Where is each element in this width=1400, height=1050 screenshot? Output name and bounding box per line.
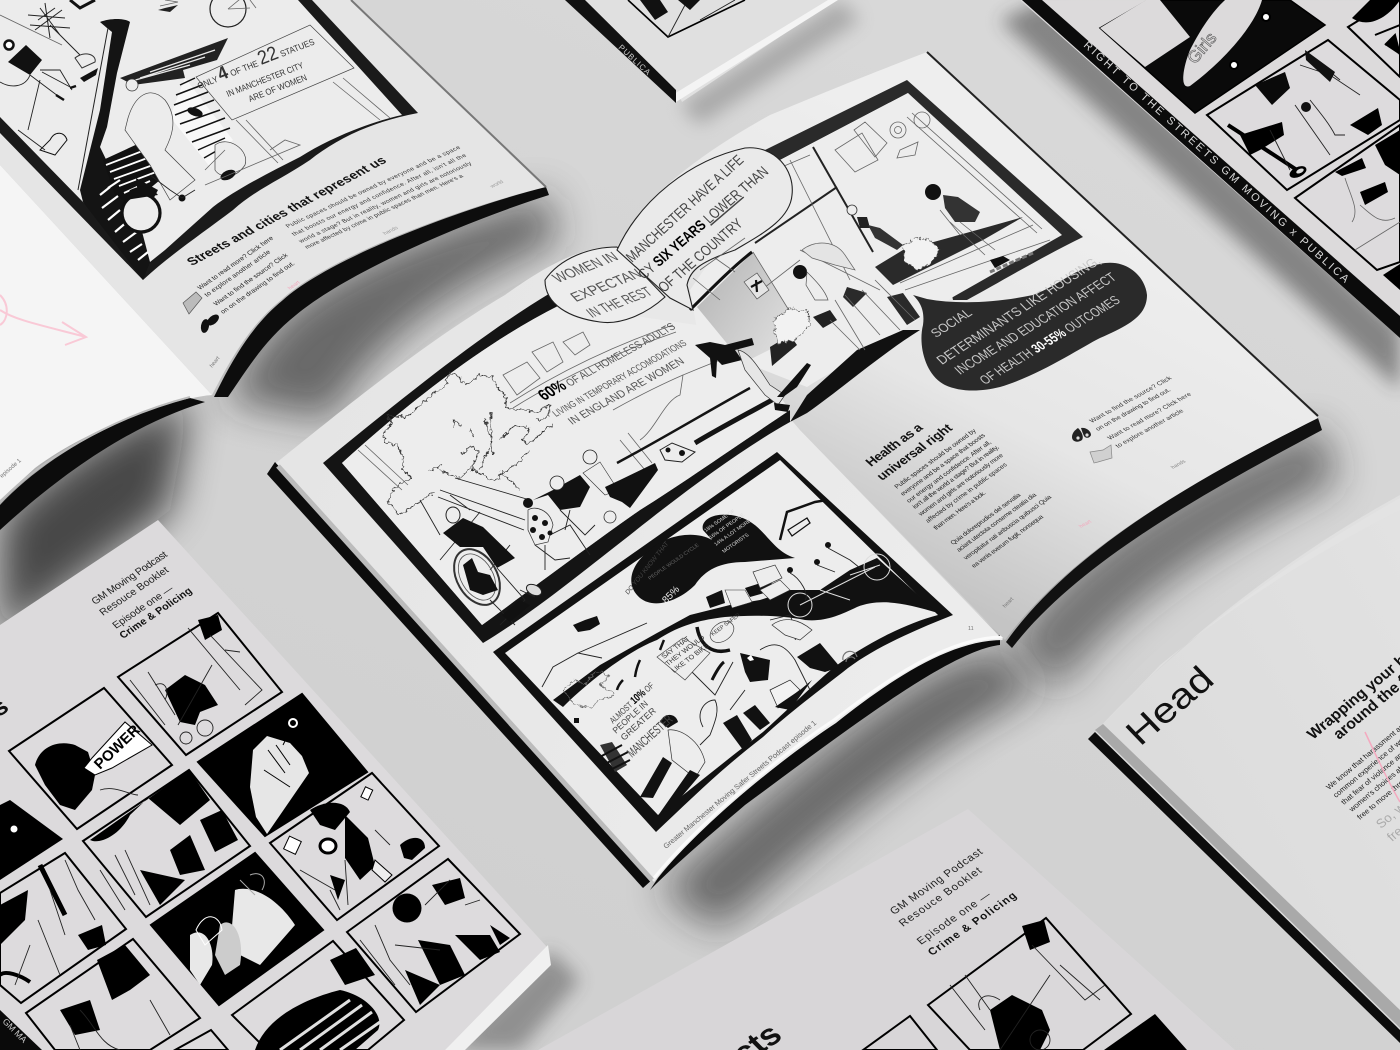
tree scribble bbox=[563, 672, 615, 708]
protesters bbox=[617, 615, 857, 778]
body text: health: veropitatur rati aribuscia quibusci Quia bbox=[962, 494, 1054, 561]
footers and page number: heart bbox=[1078, 519, 1094, 529]
panel: pole and walkers bbox=[0, 853, 126, 1003]
panel: figure with hat bbox=[26, 939, 200, 1050]
statistic text: IN ENGLAND ARE WOMEN bbox=[566, 356, 687, 427]
panel: sun and figures bbox=[347, 859, 520, 1012]
booklet: bottom-centre cover bbox=[538, 809, 1235, 1050]
call to action notes: Want to read more? Click here bbox=[196, 235, 276, 291]
billboard with statues statistic: IN MANCHESTER CITY bbox=[225, 60, 305, 99]
bicycle bbox=[160, 0, 256, 27]
cover titles: Crime & Policing bbox=[118, 586, 195, 641]
comic panel one: homeless statistic bbox=[323, 292, 790, 643]
cover panel: figure bbox=[1295, 125, 1400, 270]
heading: health: universal right bbox=[873, 421, 956, 483]
black speech bubble: 18% SOME OF bbox=[703, 509, 737, 533]
black road stripes bbox=[640, 757, 700, 817]
billboard with statues statistic: ARE OF WOMEN bbox=[247, 72, 308, 104]
body text: health: than men. Here's a look. bbox=[932, 490, 988, 531]
body text: health: aciant utectota conseme cteatia dia bbox=[955, 492, 1039, 553]
road stripes bbox=[617, 388, 772, 463]
protest sign bbox=[657, 635, 711, 680]
protest sign: LIKE TO BIKE bbox=[670, 643, 711, 674]
spine text: PUBLICA bbox=[617, 43, 653, 77]
call to action notes: Want to find the source? Click bbox=[1088, 375, 1174, 424]
skateboarder across the gutter bbox=[695, 338, 811, 412]
footer line: Greater Manchester Moving Safer Streets Podcast episode 1 bbox=[661, 718, 818, 850]
cover titles: Resouce Booklet bbox=[897, 865, 985, 929]
black speech bubble: PEOPLE WOULD CYCLE bbox=[647, 543, 701, 581]
body text: health: Quia doloreprudios del servatia bbox=[949, 492, 1023, 546]
cover titles: GM Moving Podcast bbox=[90, 550, 170, 607]
statistic text: ten percent bbox=[607, 680, 675, 760]
frame bbox=[765, 80, 1083, 300]
badge: KEEP SAFER bbox=[710, 612, 742, 637]
call to action notes: on on the drawing to find out. bbox=[219, 260, 297, 315]
cover panel bbox=[628, 0, 745, 37]
black speech bubble: 85% bbox=[660, 584, 682, 606]
billboard with statues statistic bbox=[192, 25, 390, 163]
speech bubble: social determinants: OF HEALTH 30-55% OUTCOMES bbox=[976, 293, 1123, 387]
page shadow band bbox=[214, 187, 549, 397]
house line drawing bbox=[542, 500, 827, 687]
panel: stroller bbox=[928, 918, 1131, 1050]
booklet: bottom-left cover bbox=[0, 520, 551, 1050]
black road sweep bbox=[553, 558, 938, 707]
striped blocks bbox=[100, 142, 160, 260]
panel: dancers bbox=[270, 773, 439, 920]
walker with dog and plant bbox=[0, 0, 178, 155]
speech bubble: women in Manchester left half: EXPECTAN bbox=[567, 266, 646, 305]
badge bbox=[706, 612, 742, 647]
speech bubble: life expectancy statistic: MANCHESTER HAVE A LIFE bbox=[623, 152, 747, 266]
body text: health: Public spaces should be owned by bbox=[893, 427, 978, 490]
statistic text: LIVING IN TEMPORARY ACCOMODATIONS bbox=[551, 338, 690, 419]
footers and page number: 11 bbox=[968, 626, 974, 632]
right page bbox=[0, 0, 546, 395]
body paragraph: world a stage? But in reality, women and girls are notoriously bbox=[296, 160, 474, 245]
panel: bottom sliver bbox=[175, 1030, 228, 1050]
frame bbox=[323, 292, 790, 643]
body text: health: our energy and confidence. After all, bbox=[905, 439, 993, 504]
protest sign: THEY WOULD bbox=[664, 635, 707, 667]
panel: black group bbox=[151, 853, 323, 1005]
call to action notes: on on the drawing to find out. bbox=[1094, 387, 1173, 432]
booklet: top-centre closed cover bbox=[565, 0, 838, 103]
panel: megaphone: POWER bbox=[92, 722, 144, 773]
heading: Head bbox=[1117, 658, 1222, 753]
polka dot figure bbox=[523, 475, 595, 570]
call to action notes: Want to read more? Click here bbox=[1106, 391, 1194, 441]
body text: health: everyone and be a space that boosts bbox=[899, 432, 988, 497]
right page bbox=[617, 52, 1318, 640]
spine corner bbox=[0, 1010, 42, 1050]
speech bubble: life expectancy statistic: CY SIX YEARS LOWER THAN bbox=[635, 164, 772, 283]
protest sign: SAY THAT bbox=[660, 635, 692, 660]
cover panel: surfboard: Girls bbox=[1184, 29, 1221, 68]
footers and page number bbox=[968, 459, 1188, 632]
cover edge bbox=[267, 462, 654, 888]
icon: book bbox=[1090, 445, 1112, 463]
cover titles: GM Moving Podcast bbox=[888, 846, 985, 917]
footers and page number: heart bbox=[1002, 596, 1016, 609]
body paragraph: that boosts our energy and confidence. After all, isn't all the bbox=[290, 153, 469, 237]
call to action notes: to explore another article bbox=[203, 249, 273, 298]
call to action notes bbox=[196, 235, 297, 315]
panel: megaphone bbox=[9, 688, 172, 829]
page block and cover edge bbox=[1095, 724, 1400, 1028]
speech bubble: social determinants: DETERMINANTS LIKE HOUSING, bbox=[933, 253, 1104, 367]
call to action notes: to explore another article bbox=[1114, 408, 1186, 449]
bird bbox=[573, 616, 600, 632]
booklet: bottom-right open page bbox=[1088, 495, 1400, 1043]
panel: party scene bbox=[83, 770, 250, 917]
pharmacy sign bbox=[744, 273, 769, 299]
cover titles: Crime & Policing bbox=[926, 890, 1019, 958]
spine title: RIGHT TO THE STREETS GM MOVING x PUBLICA bbox=[1081, 39, 1351, 286]
black road band bbox=[80, 19, 150, 280]
black speech bubble: MOTORISTS bbox=[721, 532, 751, 554]
cover titles bbox=[724, 846, 1019, 1050]
call to action notes: Want to find the source? Click bbox=[212, 252, 290, 307]
heading: health: Health as a bbox=[862, 420, 926, 469]
body text: health: affected by crime in public spaces bbox=[924, 461, 1009, 524]
speech bubble: social determinants: SOCIAL bbox=[928, 305, 975, 340]
icon: book bbox=[183, 292, 202, 314]
cover panel: surfboard bbox=[1100, 0, 1325, 113]
booklet: top-right closed cover bbox=[1020, 0, 1400, 338]
footers and page number: hands bbox=[1170, 459, 1188, 470]
heading: Streets and cities that represent us bbox=[183, 153, 390, 268]
statistic text: ten percent: MANCHESTER bbox=[624, 712, 675, 760]
statistic text bbox=[534, 317, 690, 427]
cover titles: Episode one — bbox=[915, 890, 994, 947]
walking adults and dog bbox=[583, 443, 695, 523]
pink stroke bbox=[1365, 732, 1400, 802]
statistic text: ten percent: ALMOST 10% OF bbox=[607, 680, 657, 726]
body text: health bbox=[893, 427, 1054, 569]
body text: health: ea venis everum fugit, nonsequa bbox=[970, 514, 1045, 569]
speech bubble: women in Manchester left half bbox=[545, 247, 665, 323]
black speech bubble: 14% A LOT MORE bbox=[713, 518, 753, 547]
billboard with statues statistic: ONLY 4 OF THE 22 STATUES bbox=[192, 29, 317, 94]
building lines bbox=[358, 325, 745, 490]
comic panel two: right page scene bbox=[690, 80, 1083, 422]
slide and playground bbox=[420, 478, 590, 570]
panel: stripes bbox=[232, 941, 404, 1050]
interior wall shading bbox=[697, 252, 803, 363]
footers: heart bbox=[209, 355, 222, 369]
panel: black bbox=[1104, 1014, 1187, 1050]
cover panel: upper right bbox=[1348, 0, 1400, 77]
footers: hands bbox=[382, 226, 400, 236]
speech bubble: women in Manchester left half: WOMEN IN bbox=[549, 250, 622, 286]
black speech bubble: DO YOU KNOW THAT bbox=[624, 540, 670, 596]
body paragraph: Public spaces should be owned by everyone and be a space bbox=[284, 145, 463, 229]
booklet: top-left open spread bbox=[0, 0, 549, 530]
panel: black left bbox=[0, 800, 63, 880]
cover panel: lower corner bbox=[1383, 264, 1400, 290]
cover titles: Resouce Booklet bbox=[98, 565, 171, 618]
left page with pink arrow bbox=[0, 165, 212, 530]
booklet: centre open spread bbox=[267, 52, 1322, 890]
black spine bbox=[1022, 0, 1400, 338]
speech bubble: social determinants bbox=[913, 253, 1147, 391]
speech bubble: women in Manchester left half: IN THE REST bbox=[583, 284, 656, 321]
body text: health: isn't all the world a stage? But in reality, bbox=[911, 444, 1001, 510]
hatched triangle bbox=[120, 38, 233, 167]
comic panel three: protest and cyclists bbox=[493, 452, 953, 832]
cover panel: street pole bbox=[1207, 40, 1400, 190]
icon: binoculars bbox=[1072, 428, 1091, 442]
mother with stroller bbox=[443, 507, 543, 625]
cover titles: Episode one — bbox=[111, 583, 177, 631]
cyclists bbox=[753, 542, 890, 617]
cycle at lower left bbox=[600, 742, 627, 772]
footers: world bbox=[488, 180, 505, 190]
body text: health: women and girls are notoriously more bbox=[916, 452, 1005, 518]
statistic text: ten percent: GREATER bbox=[619, 705, 658, 742]
spine corner: GM MA bbox=[1, 1016, 29, 1045]
black planters and road bbox=[875, 217, 1023, 285]
call to action notes bbox=[1088, 375, 1194, 449]
body paragraph: more affected by crime in public spaces than men. Here's a bbox=[303, 173, 465, 250]
panel: megaphone sliver bbox=[863, 1016, 937, 1050]
statistic text: ten percent: PEOPLE IN bbox=[611, 699, 650, 735]
speech bubble: life expectancy statistic bbox=[617, 148, 792, 310]
wheelchair and rider bbox=[122, 79, 300, 232]
panel: stroller bbox=[118, 613, 282, 755]
comic frame bbox=[0, 0, 418, 280]
planter foliage bbox=[773, 238, 940, 343]
black speech bubble: 16% OF PEOPLE bbox=[708, 512, 747, 540]
statistic text: 60% OF ALL HOMELESS ADULTS bbox=[534, 317, 679, 404]
footers bbox=[209, 180, 505, 369]
icon: binoculars bbox=[200, 312, 221, 334]
tree scribble bbox=[382, 372, 552, 515]
figures bbox=[793, 184, 1033, 350]
white sliver of pavement bbox=[78, 28, 108, 190]
lamp post bbox=[890, 112, 1042, 233]
cover titles bbox=[0, 550, 195, 726]
left page bbox=[276, 247, 1003, 882]
speech bubble: life expectancy statistic: OF THE COUNTRY bbox=[655, 216, 747, 296]
storefront lines bbox=[690, 122, 1050, 333]
footers: heart bbox=[287, 280, 302, 291]
black speech bubble bbox=[624, 509, 795, 606]
panel: black with fist bbox=[198, 694, 367, 836]
speech bubble: social determinants: INCOME AND EDUCATION AFFECT bbox=[951, 269, 1120, 377]
